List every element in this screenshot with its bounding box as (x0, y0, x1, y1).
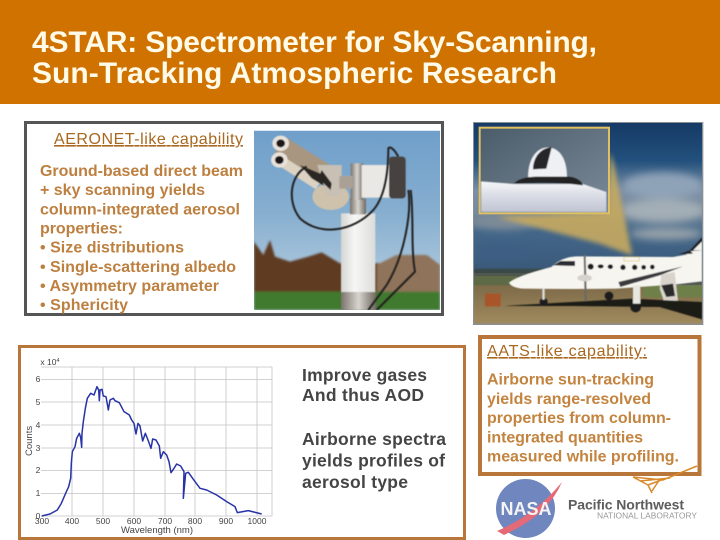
axis tick labels (35, 357, 267, 526)
truss mark (633, 466, 697, 493)
text: airborne spectra: aerosol type (302, 472, 408, 492)
AERONET heading: AERONET-like capability (54, 131, 243, 148)
panel: spectrum chart and text (20, 346, 464, 538)
AATS heading: AATS-like capability: (487, 343, 647, 360)
photo: research aircraft with inset dome (470, 122, 705, 325)
text: improve gases: And thus AOD (302, 385, 424, 405)
axis tick labels: 3 (36, 443, 41, 453)
AATS description text: measured while profiling. (487, 448, 679, 466)
x axis label: Wavelength (nm) (121, 525, 193, 536)
AERONET description text: Ground-based direct beam (40, 163, 243, 180)
AERONET description text: • Single-scattering albedo (40, 259, 236, 276)
AATS description text: yields range-resolved (487, 391, 651, 408)
text: airborne spectra: Airborne spectra (302, 429, 446, 449)
AERONET description text: properties: (40, 220, 123, 238)
title: 4STAR: Spectrometer for Sky-Scanning, (32, 26, 597, 59)
axis tick labels: 4 (57, 358, 60, 364)
AATS description text: properties from column- (487, 410, 671, 427)
title: Sun-Tracking Atmospheric Research (32, 57, 557, 90)
axis tick labels: 1 (36, 488, 41, 498)
axis tick labels: x 10 (40, 357, 57, 367)
axis tick labels: 300 (35, 516, 49, 526)
AATS description text: Airborne sun-tracking (487, 372, 654, 388)
y axis label: Counts (24, 426, 35, 456)
axis tick labels: 500 (96, 516, 110, 526)
panel: AATS-like capability (480, 337, 700, 474)
axis tick labels: 400 (65, 516, 79, 526)
text: improve gases: Improve gases (302, 365, 427, 385)
inset photo: dome (480, 128, 609, 213)
AERONET description text: • Sphericity (40, 297, 128, 314)
photo: sun photometer (254, 131, 440, 310)
logo: Pacific Northwest National Laboratory (568, 466, 698, 520)
AERONET description text: + sky scanning yields (40, 182, 205, 199)
axis tick labels: 800 (188, 516, 202, 526)
axis tick labels: 600 (127, 516, 141, 526)
subtitle: NATIONAL LABORATORY (597, 512, 698, 520)
logo: NASA: NASA (500, 499, 552, 519)
AERONET description text: column-integrated aerosol (40, 202, 240, 218)
title banner (0, 0, 720, 104)
axis tick labels: 1000 (248, 516, 267, 526)
AERONET description text: • Asymmetry parameter (40, 278, 219, 295)
text: airborne spectra: yields profiles of (302, 450, 445, 470)
axis tick labels: 2 (36, 465, 41, 475)
axis tick labels: 4 (36, 420, 41, 430)
axis tick labels: 0 (36, 511, 41, 521)
yellow beam from dome to inset (496, 152, 632, 255)
line chart: spectrum counts vs wavelength (24, 357, 272, 536)
axis tick labels: 6 (36, 374, 41, 384)
axis tick labels: 900 (219, 516, 233, 526)
spectrum curve (42, 387, 262, 516)
AERONET description text: • Size distributions (40, 240, 184, 256)
axis tick labels: 5 (36, 397, 41, 407)
logo: NASA (496, 479, 562, 538)
AATS description text: integrated quantities (487, 430, 643, 446)
wordmark: Pacific Northwest (568, 496, 684, 512)
panel: AERONET-like capability (26, 122, 442, 314)
axis tick labels: 700 (158, 516, 172, 526)
